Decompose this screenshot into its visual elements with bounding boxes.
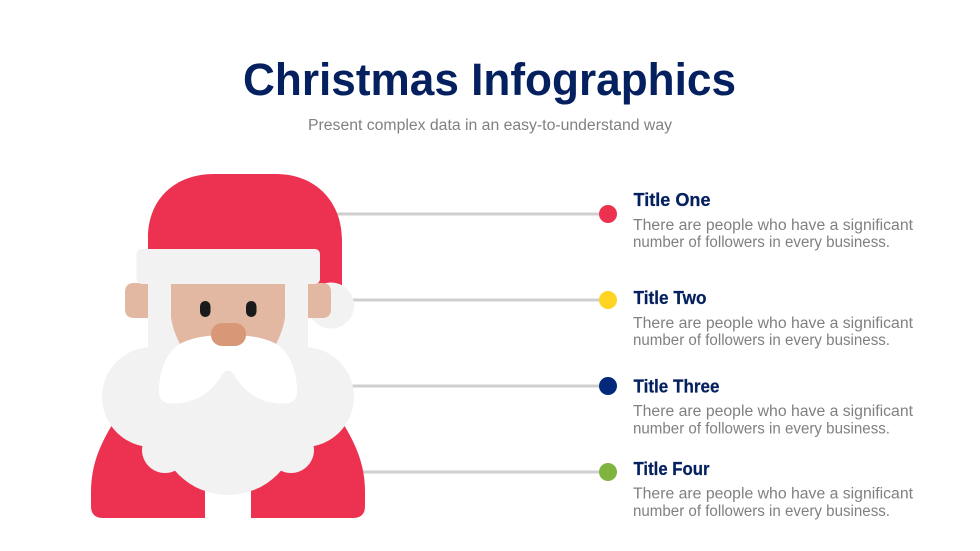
text block: title three: Title Three [634, 376, 720, 396]
hat pompom [308, 282, 354, 328]
text block: title two: number of followers in every business. [633, 332, 890, 349]
text block: title two: There are people who have a significant [633, 315, 914, 332]
text block: title four: Title Four [634, 459, 710, 479]
eyes [200, 301, 256, 317]
subtitle: Present complex data in an easy-to-understand way [308, 117, 672, 134]
text block: title three: There are people who have a significant [633, 403, 914, 420]
santa coat [91, 425, 365, 518]
moustache [159, 335, 297, 404]
title: Christmas Infographics [243, 54, 736, 105]
marker: title one [599, 205, 617, 223]
text block: title three [633, 376, 914, 438]
text block: title four: number of followers in every business. [633, 503, 890, 520]
text block: title one: Title One [634, 190, 710, 210]
connector: title two [350, 298, 608, 302]
text block: title three: number of followers in every business. [633, 420, 890, 438]
marker: title two [599, 291, 617, 309]
text block: title two: Title Two [634, 288, 706, 308]
connector: title one [335, 212, 608, 216]
santa hat [148, 174, 342, 286]
connector: title four [360, 470, 608, 474]
connector: title three [350, 384, 608, 388]
ears [125, 283, 331, 318]
text block: title one: There are people who have a significant [633, 217, 914, 234]
hat brim [136, 249, 320, 284]
beard [102, 283, 354, 495]
text block: title one [633, 190, 914, 251]
nose [211, 323, 246, 346]
illustration: santa [91, 174, 365, 518]
text block: title two [633, 288, 914, 349]
marker: title four [599, 463, 617, 481]
text block: title four: There are people who have a significant [633, 486, 914, 502]
face [171, 283, 285, 348]
marker: title three [599, 377, 617, 395]
text block: title four [633, 459, 914, 520]
text block: title one: number of followers in every business. [633, 234, 890, 251]
